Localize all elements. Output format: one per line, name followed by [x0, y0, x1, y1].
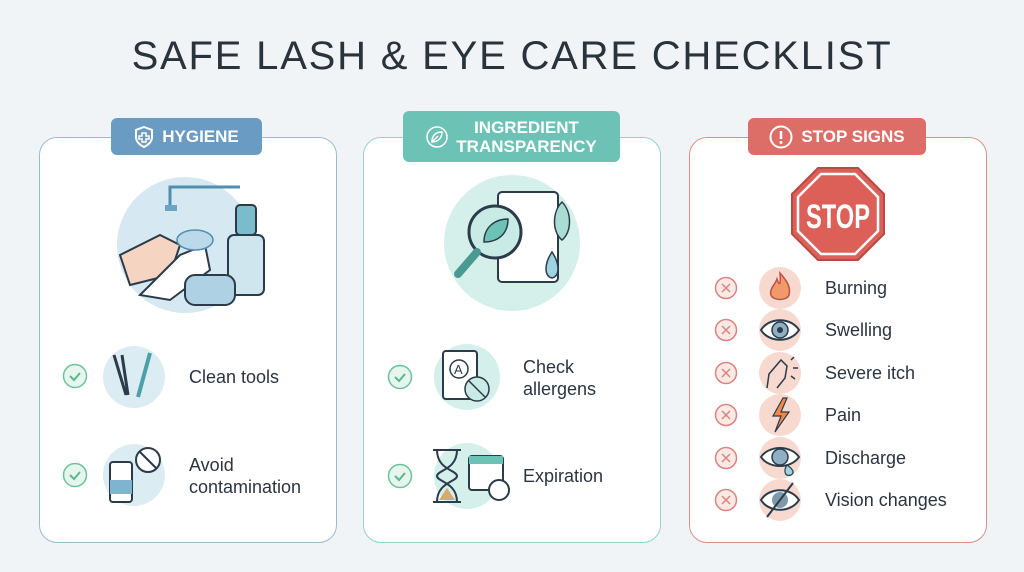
row: severe itch	[714, 352, 915, 394]
row: burning	[714, 267, 887, 309]
badge: ingredient transparency	[403, 111, 620, 162]
row: discharge	[714, 437, 906, 479]
item: avoid contamination	[62, 444, 301, 506]
panel: stop signs	[689, 137, 987, 543]
row: burning: Burning	[825, 278, 887, 298]
row: vision changes: Vision changes	[825, 490, 947, 510]
icon: stop sign	[791, 167, 885, 261]
row: vision changes	[714, 479, 947, 521]
panel: hygiene	[39, 137, 337, 543]
item: clean tools: Clean tools	[189, 367, 279, 387]
row: discharge: Discharge	[825, 448, 906, 468]
item: avoid contamination: contamination	[189, 477, 301, 497]
item: expiration: Expiration	[523, 466, 603, 486]
item: check allergens: Check	[523, 357, 574, 377]
row: pain: Pain	[825, 405, 861, 425]
row: swelling: Swelling	[825, 320, 892, 340]
item: check allergens	[388, 344, 596, 410]
illustration: magnifier over label	[444, 175, 580, 311]
title: SAFE LASH & EYE CARE CHECKLIST	[132, 34, 892, 78]
item: expiration	[388, 443, 603, 509]
badge: stop signs: STOP SIGNS	[801, 127, 905, 146]
item: check allergens: allergens	[523, 379, 596, 399]
badge: hygiene	[111, 118, 262, 155]
row: severe itch: Severe itch	[825, 363, 915, 383]
badge: ingredient transparency: INGREDIENT	[474, 118, 579, 136]
row: swelling	[714, 309, 892, 351]
badge: stop signs	[748, 118, 926, 155]
item: avoid contamination: Avoid	[189, 455, 234, 475]
badge: ingredient transparency: TRANSPARENCY	[456, 136, 597, 156]
item: clean tools	[62, 346, 279, 408]
panel: ingredient transparency	[363, 137, 661, 543]
row: pain	[714, 394, 861, 436]
item: check allergens: A	[454, 362, 463, 377]
illustration: hand washing	[117, 177, 265, 313]
badge: hygiene: HYGIENE	[162, 127, 239, 146]
list: stop symptoms	[714, 267, 947, 521]
